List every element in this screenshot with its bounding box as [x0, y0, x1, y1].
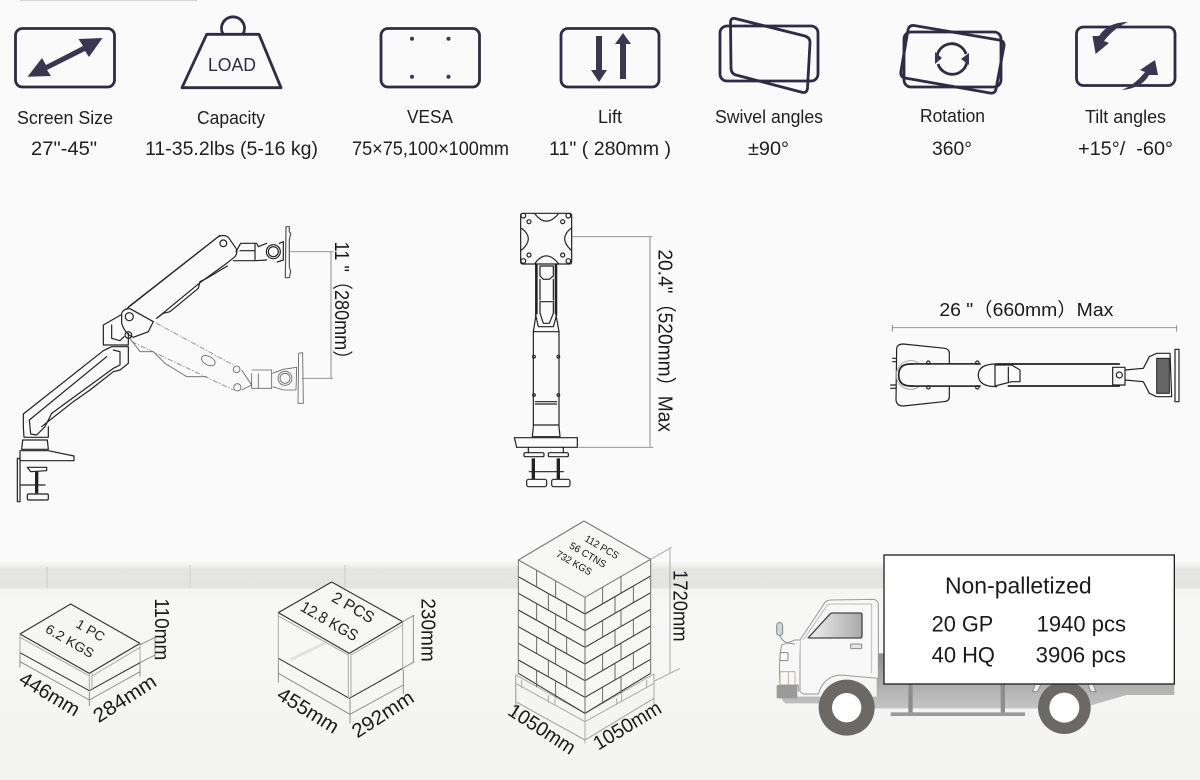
carton dimensions: 446mm [15, 668, 84, 721]
carton dimensions: 284mm [89, 671, 161, 728]
spec: tilt angles: Tilt angles [1085, 107, 1166, 127]
spec: tilt angles [1076, 22, 1175, 160]
carton box: 2 PCS [329, 589, 377, 627]
spec: rotation [901, 25, 1004, 160]
spec: capacity [145, 17, 318, 160]
elbow and lower arm [23, 315, 128, 437]
diagram: arm top view with max extension [891, 299, 1179, 406]
panel: truck with container loading [777, 555, 1174, 736]
spec: capacity: 11-35.2lbs (5-16 kg) [145, 139, 318, 160]
base and clamps [514, 438, 577, 487]
spec: swivel angles: Swivel angles [715, 107, 823, 127]
desk base [891, 344, 949, 406]
spec: rotation: Rotation [920, 106, 985, 126]
extension dimension: 26 "（660mm）Max [939, 299, 1114, 320]
carton box: 12.8 KGS [297, 599, 361, 645]
spec: lift [549, 28, 671, 160]
spec: VESA: 75×75,100×100mm [352, 139, 509, 160]
spec: screen size [16, 28, 114, 160]
spec: lift: Lift [598, 107, 622, 127]
carton stack [518, 521, 651, 713]
panel: double unit carton [273, 582, 439, 743]
mounting plate [521, 213, 572, 264]
spec: VESA: VESA [407, 107, 453, 127]
panel: specification icons [16, 17, 1175, 160]
pallet dimensions: 1720mm [668, 570, 690, 642]
carton dimensions [273, 598, 439, 743]
lift dimension: 11 "（280mm） [330, 242, 353, 368]
carton box [20, 604, 140, 691]
container capacity box: 20 GP [932, 612, 993, 637]
pallet dimensions: 1050mm [590, 697, 665, 755]
tilt head and plate [1125, 349, 1179, 402]
spec: rotation: 360° [932, 139, 972, 160]
spec: capacity: LOAD [208, 54, 256, 75]
carton dimensions: 455mm [273, 684, 343, 738]
carton stack: 732 KGS [554, 549, 594, 578]
pallet dimensions: 1050mm [504, 700, 579, 759]
spec: tilt angles: +15°/ -60° [1078, 139, 1173, 160]
desk clamp [17, 440, 74, 502]
container capacity box: 3906 pcs [1036, 642, 1126, 667]
extension dimension [892, 299, 1177, 332]
spec: capacity: Capacity [197, 108, 265, 128]
pallet [516, 674, 654, 740]
upper position of arm [122, 227, 291, 338]
pallet dimensions [504, 547, 690, 759]
panel: palletized cartons [504, 521, 690, 759]
carton dimensions: 230mm [417, 598, 439, 662]
container capacity box: 40 HQ [932, 642, 995, 667]
spec: lift: 11" ( 280mm ) [549, 139, 671, 160]
spec: screen size: 27"-45" [31, 139, 97, 160]
diagram: arm front view with max height [514, 213, 677, 487]
lower position of arm (dashed ghost) [130, 313, 303, 403]
spec: VESA [352, 28, 509, 160]
carton dimensions: 110mm [150, 598, 172, 660]
column [532, 265, 560, 437]
container capacity box: 1940 pcs [1037, 612, 1126, 637]
carton stack: 56 CTNS [567, 541, 608, 571]
truck illustration [777, 599, 1174, 736]
arm segments [896, 361, 1125, 389]
container capacity box: Non-palletized [945, 572, 1092, 598]
carton dimensions [15, 598, 172, 728]
carton stack: 112 PCS [582, 534, 621, 562]
lift dimension [289, 242, 353, 378]
spec: screen size: Screen Size [17, 108, 113, 128]
carton box [278, 582, 403, 698]
carton box: 6.2 KGS [43, 621, 97, 661]
height dimension: 20.4"（520mm）Max [654, 249, 677, 433]
diagram: arm side view with lift range [17, 227, 353, 502]
spec: swivel angles: ±90° [748, 139, 789, 160]
carton box: 1 PC [73, 616, 108, 645]
carton dimensions: 292mm [348, 687, 418, 743]
panel: single unit carton [15, 598, 172, 728]
spec: swivel angles [715, 18, 823, 160]
height dimension [572, 237, 677, 447]
container capacity box [884, 555, 1174, 684]
